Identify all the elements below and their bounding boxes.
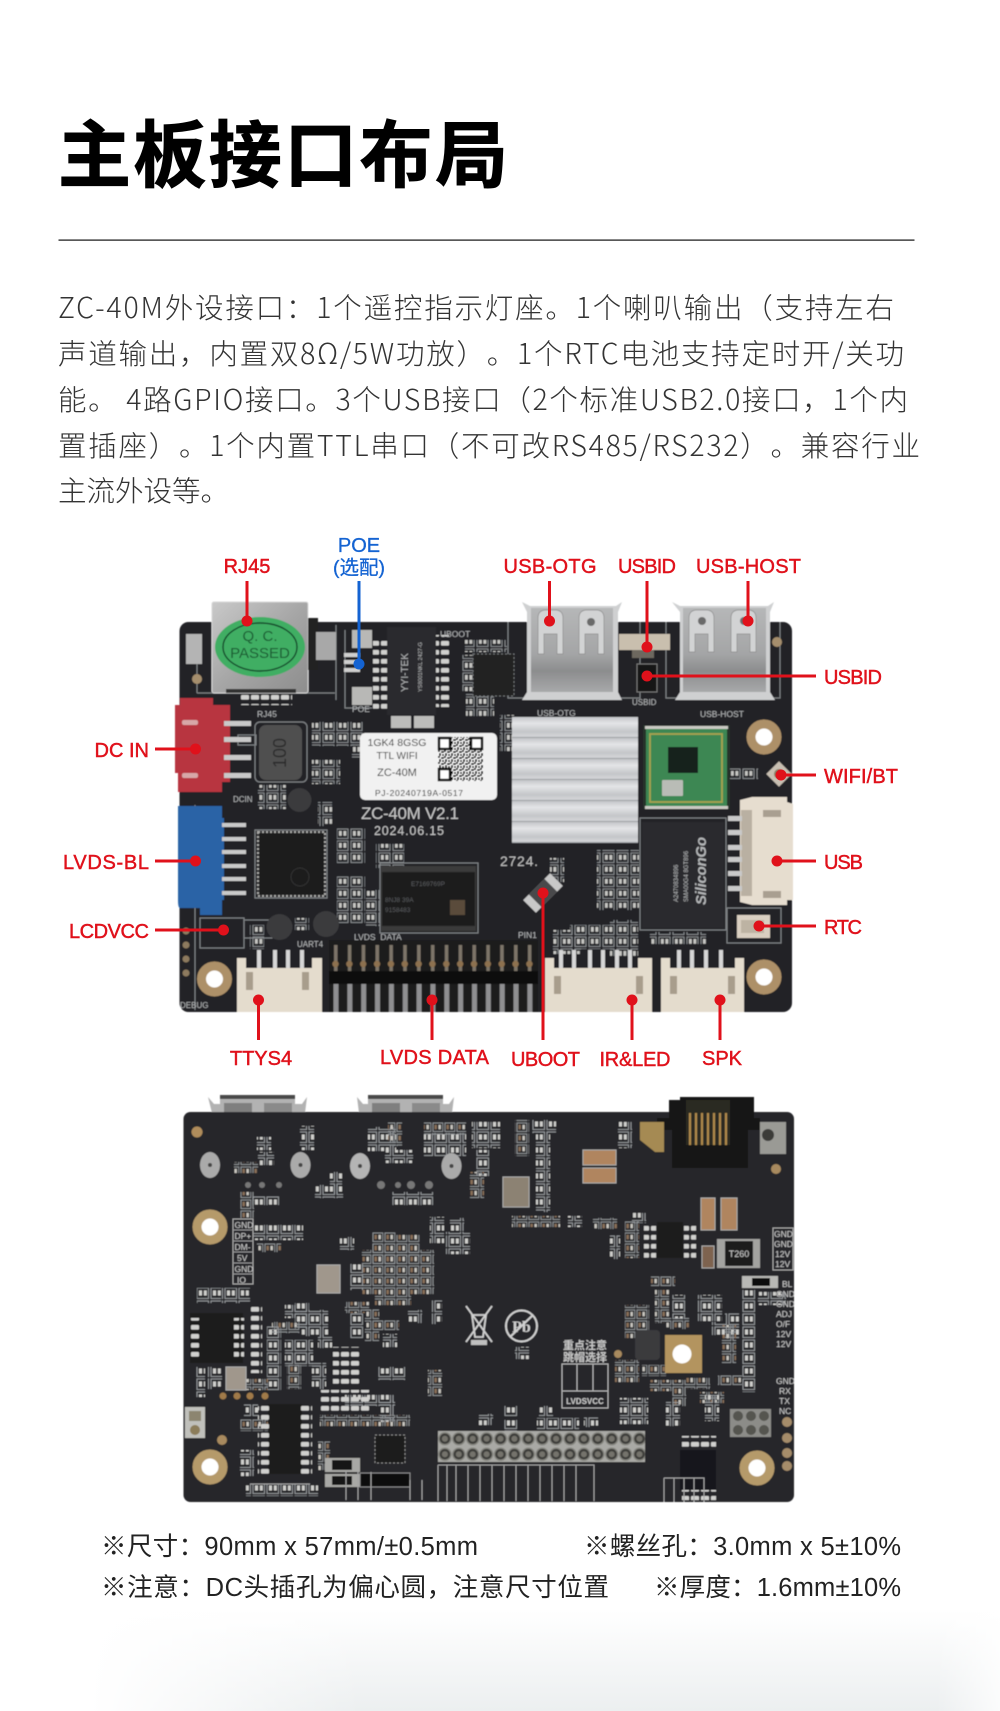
power pin legend: GND <box>774 1239 793 1249</box>
specification notes: ※螺丝孔：3.0mm x 5±10% <box>584 1533 901 1561</box>
leader: lcdvcc <box>69 921 229 943</box>
power pin legend: RX <box>779 1386 791 1396</box>
leader: dc in <box>95 740 201 762</box>
leader: uboot <box>511 888 580 1071</box>
inductors <box>259 725 339 940</box>
recycling and lead-free marks: Pb <box>512 1319 531 1336</box>
rj45 jack: PASSED <box>230 645 290 662</box>
jumper note silkscreen <box>562 1337 608 1408</box>
specification notes: ※厚度：1.6mm±10% <box>654 1574 901 1602</box>
board text: UART4 <box>297 940 324 949</box>
recycling and lead-free marks <box>466 1306 537 1345</box>
leader: poe: POE <box>338 535 380 557</box>
dense component areas <box>195 1120 786 1496</box>
leader: usbid right: USBID <box>824 667 882 689</box>
version silkscreen: 2024.06.15 <box>374 824 444 838</box>
flash chip <box>642 822 724 928</box>
version silkscreen <box>361 804 538 869</box>
leader: usb <box>772 852 863 874</box>
product sticker with qr: ZC-40M <box>377 767 417 779</box>
ir and led connector <box>545 950 652 1012</box>
power pin legend: 12V <box>776 1329 791 1339</box>
board text: POE <box>352 704 370 714</box>
board text: DCIN <box>233 795 253 804</box>
power pin legend: GND <box>776 1289 795 1299</box>
ram chip <box>381 866 476 931</box>
usb otg port <box>522 602 622 700</box>
leader: usb-otg: USB-OTG <box>504 556 596 578</box>
intro paragraph: 能。 4路GPIO接口。3个USB接口（2个标准USB2.0接口，1个内 <box>58 378 908 419</box>
ethernet chip: YS8001NKL 2427-G <box>418 642 424 692</box>
lvds pad labels <box>250 1465 704 1502</box>
leader: usb-host: USB-HOST <box>696 556 801 578</box>
title: 主板接口布局 <box>58 97 508 203</box>
version silkscreen: ZC-40M V2.1 <box>361 804 459 823</box>
ethernet chip <box>387 627 436 715</box>
silkscreen traces <box>195 622 781 1010</box>
specification notes: ※尺寸：90mm x 57mm/±0.5mm <box>101 1533 478 1561</box>
power pin legend: O/F <box>776 1319 790 1329</box>
product sticker with qr: PJ-20240719A-0517 <box>375 788 463 798</box>
usb pin legend: GND <box>234 1264 253 1274</box>
leader: usb: USB <box>824 852 863 874</box>
specification notes <box>101 1533 901 1602</box>
usb pin legend: DP+ <box>234 1231 251 1241</box>
product sticker with qr: TTL WIFI <box>376 751 418 762</box>
usb pin legend: IO <box>237 1275 246 1285</box>
back chips regulators and crystals: T260 <box>729 1249 749 1259</box>
blue lvds-bl connector <box>178 806 246 915</box>
back small vias <box>245 1181 433 1189</box>
white usb connector <box>728 797 793 905</box>
power pin legend: ADJ <box>776 1309 792 1319</box>
ram chip: 8NJ8 39A <box>385 897 414 904</box>
product sticker with qr: 1GK4 8GSG <box>368 737 426 749</box>
leader: lcdvcc: LCDVCC <box>69 921 149 943</box>
lvds controller chip <box>258 832 325 896</box>
specification notes: ※注意：DC头插孔为偏心圆，注意尺寸位置 <box>101 1574 609 1602</box>
ethernet chip: YYI-TEK <box>400 653 411 692</box>
usb pin legend: GND <box>234 1220 253 1230</box>
power pin legend: GND <box>774 1229 793 1239</box>
leader: lvds-bl: LVDS-BL <box>63 852 149 874</box>
leader: usbid top <box>618 556 676 652</box>
intro paragraph: 置插座）。1个内置TTL串口（不可改RS485/RS232）。兼容行业 <box>58 424 920 465</box>
usb pin legend: 5V <box>237 1253 248 1263</box>
board text: RJ45 <box>257 709 277 719</box>
ram chip: 9158483 <box>385 907 411 914</box>
flash chip: SMA00G4 8GT896 <box>684 850 690 902</box>
power pin legend: BL <box>782 1279 793 1289</box>
flash chip: A2470834896 <box>674 864 680 902</box>
heatsink <box>512 717 638 843</box>
uboot button <box>523 873 563 913</box>
smd component clusters <box>250 635 758 956</box>
back rj45 jack <box>640 1097 786 1168</box>
back mounting holes <box>197 1214 770 1481</box>
power pin legend: GND <box>776 1299 795 1309</box>
board text <box>180 629 744 1010</box>
pcb base <box>180 622 792 1012</box>
leader: uboot: UBOOT <box>511 1049 580 1071</box>
leader: poe <box>333 535 385 670</box>
leader: lvds data <box>380 994 490 1069</box>
leader: rj45 <box>224 556 270 626</box>
usb pin legend <box>233 1219 253 1285</box>
rj45 jack <box>186 602 336 705</box>
board text: UBOOT <box>440 629 470 639</box>
leader: lvds data: LVDS DATA <box>380 1047 490 1069</box>
intro paragraph: 声道输出，内置双8Ω/5W功放）。1个RTC电池支持定时开/关功 <box>58 332 904 373</box>
product sticker with qr <box>360 733 497 800</box>
inductors: 100 <box>270 738 290 768</box>
jumper note silkscreen: 重点注意 <box>563 1337 607 1353</box>
leader: rtc: RTC <box>824 917 862 939</box>
small qfn chip <box>473 654 514 696</box>
usb pin legend: DM- <box>234 1242 251 1252</box>
intro paragraph: ZC-40M外设接口：1个遥控指示灯座。1个喇叭输出（支持左右 <box>58 286 894 327</box>
rj45 jack: Q. C. <box>242 628 278 645</box>
red dc-in connector <box>175 698 251 792</box>
leader: usbid right <box>642 667 882 689</box>
leader: ttys4 <box>230 994 292 1070</box>
leader: ir and led <box>600 994 670 1071</box>
back lvds through-hole strip <box>438 1431 645 1462</box>
board text: PIN1 <box>518 930 537 940</box>
title divider rule <box>58 240 914 241</box>
power pin legend: NC <box>779 1406 791 1416</box>
leader: usb-host <box>696 556 801 626</box>
front board photo <box>175 602 793 1012</box>
power pin legend <box>742 1228 795 1416</box>
leader: spk <box>702 994 743 1070</box>
back pcb base <box>184 1112 794 1502</box>
back board photo <box>184 1095 795 1502</box>
power pin legend: 12V <box>775 1249 790 1259</box>
poe module pads <box>352 630 434 728</box>
power pin legend: 12V <box>776 1339 791 1349</box>
spk connector <box>661 950 744 1012</box>
leader: lvds-bl <box>63 852 201 874</box>
board text: LVDS_DATA <box>354 932 402 942</box>
callout labels and leader lines <box>63 535 898 1071</box>
leader: usb-otg <box>504 556 596 626</box>
mounting holes <box>192 637 782 992</box>
leader: ir and led: IR&LED <box>600 1049 670 1071</box>
debug gold dots <box>182 928 190 976</box>
debug header pads <box>730 1409 792 1471</box>
intro paragraph <box>58 286 920 510</box>
wifi module <box>643 725 730 809</box>
gold pad with hole <box>665 1335 702 1373</box>
jumper note silkscreen: LVDSVCC <box>566 1397 604 1406</box>
board text: USBID <box>632 698 657 707</box>
leader: dc in: DC IN <box>95 740 149 762</box>
leader: rtc <box>754 917 862 939</box>
board text: DEBUG <box>180 1001 208 1010</box>
jumper note silkscreen: 跳帽选择 <box>563 1349 607 1365</box>
board text: USB-HOST <box>700 709 744 719</box>
power pin legend: GND <box>776 1376 795 1386</box>
rtc connector <box>737 915 770 938</box>
board text: USB-OTG <box>537 708 576 718</box>
usb host port <box>672 602 775 700</box>
wifi antenna socket <box>766 761 792 787</box>
usb shells on back <box>208 1095 454 1113</box>
leader: rj45: RJ45 <box>224 556 270 578</box>
usbid connector <box>619 634 670 692</box>
leader: wifi/bt: WIFI/BT <box>824 766 898 788</box>
flash chip: SiliconGo <box>693 837 710 905</box>
power pin legend: 12V <box>775 1259 790 1269</box>
leader: usbid top: USBID <box>618 556 676 578</box>
version silkscreen: 2724. <box>500 853 538 869</box>
ram chip: E7169769P <box>411 881 445 888</box>
back silver mount pads <box>192 1126 781 1445</box>
intro paragraph: 主流外设等。 <box>58 469 229 510</box>
ttys4 connector <box>237 950 322 1012</box>
power pin legend: TX <box>779 1396 790 1406</box>
bottom fade background <box>90 1610 1000 1711</box>
lvds pin header <box>329 940 538 1012</box>
leader: wifi/bt <box>776 766 898 788</box>
leader: poe: (选配) <box>333 557 385 579</box>
leader: spk: SPK <box>702 1048 743 1070</box>
leader: ttys4: TTYS4 <box>230 1048 292 1070</box>
back chips regulators and crystals <box>185 1150 760 1500</box>
